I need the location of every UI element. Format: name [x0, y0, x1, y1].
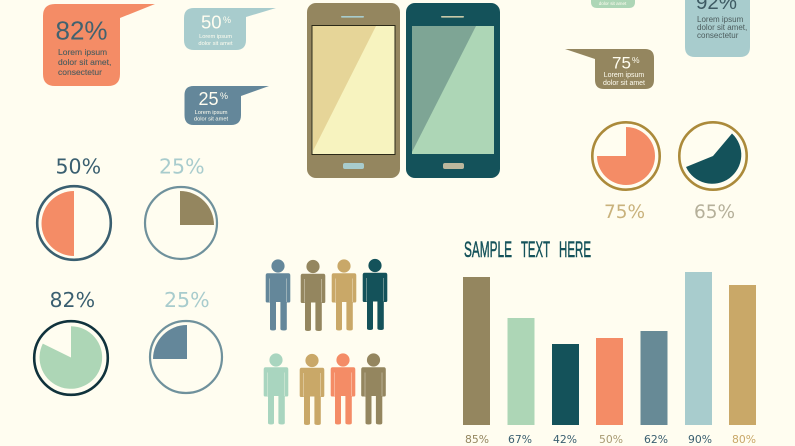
callout: 82% coral: 82%: [56, 16, 108, 46]
pie: 65% teal: [679, 122, 747, 223]
callout: 82% coral: dolor sit amet,: [58, 57, 111, 67]
person 2: [301, 260, 325, 331]
person 4: [363, 259, 387, 330]
callout: 75% olive: 75: [612, 54, 631, 72]
callout: 92% pale blue cropped: consectetur: [697, 31, 739, 40]
callout: 50% pale blue: Lorem ipsum: [199, 34, 232, 40]
phone: teal: [406, 3, 500, 178]
pie: 25% olive: 25%: [159, 154, 205, 178]
bar value labels: 50%: [599, 433, 623, 446]
pie: 25% slate: 25%: [164, 288, 210, 312]
pie: 25% slate: [150, 288, 222, 393]
person 6: [300, 354, 324, 425]
callout: mint cropped: [591, 0, 635, 8]
pie: 75% coral: 75%: [604, 202, 645, 223]
bar value labels: 80%: [732, 433, 756, 446]
callout: 75% olive: Lorem ipsum: [604, 72, 644, 79]
callout: 50% pale blue: [184, 8, 276, 50]
callout: 92% pale blue cropped: Lorem ipsum: [697, 15, 744, 24]
callout: 25% slate: 25: [198, 89, 219, 109]
chart title: HERE: [559, 237, 591, 262]
callout: 82% coral: consectetur: [58, 67, 102, 77]
callout: 75% olive: %: [632, 55, 640, 65]
person 7: [331, 353, 355, 424]
callout: 25% slate: [184, 86, 269, 125]
callout: 25% slate: dolor sit amet: [194, 116, 228, 122]
pie: 82% mint: 82%: [50, 288, 95, 312]
bar value labels: [465, 433, 756, 446]
person 8: [361, 353, 386, 424]
bar value labels: 90%: [688, 433, 712, 446]
callout: 50% pale blue: dolor sit amet: [198, 41, 233, 47]
chart title: SAMPLE: [464, 237, 512, 262]
bar chart: [463, 272, 756, 446]
person 3: [332, 259, 356, 330]
bar value labels: 42%: [553, 433, 577, 446]
bar value labels: 85%: [465, 433, 489, 446]
bar value labels: 67%: [508, 433, 532, 446]
chart title: TEXT: [521, 237, 550, 262]
callout: mint cropped: dolor sit amet: [599, 1, 627, 6]
callout: 25% slate: %: [220, 91, 228, 101]
callout: 75% olive: [565, 49, 654, 89]
phone: olive: [307, 3, 400, 178]
callout: 92% pale blue cropped: [685, 0, 750, 57]
pie: 65% teal: 65%: [694, 202, 735, 223]
callout: 82% coral: Lorem ipsum: [58, 47, 107, 57]
pie: 82% mint: [34, 288, 108, 395]
person 1: [266, 259, 290, 330]
pie: 25% olive: [145, 154, 217, 259]
callout: 50% pale blue: 50: [201, 12, 222, 32]
person 5: [264, 353, 288, 424]
people pictogram group: [264, 259, 387, 425]
screen: [312, 26, 395, 154]
callout: 75% olive: dolor sit amet: [603, 80, 645, 87]
callout: 82% coral: [43, 4, 155, 86]
screen: [412, 26, 494, 154]
pie: 50% coral: [37, 154, 111, 260]
callout: 25% slate: Lorem ipsum: [195, 110, 228, 116]
callout: 50% pale blue: %: [223, 15, 231, 25]
pie: 75% coral: [592, 122, 660, 223]
callout: 92% pale blue cropped: dolor sit amet,: [697, 23, 747, 32]
pie: 50% coral: 50%: [56, 154, 101, 178]
bar value labels: 62%: [644, 433, 668, 446]
